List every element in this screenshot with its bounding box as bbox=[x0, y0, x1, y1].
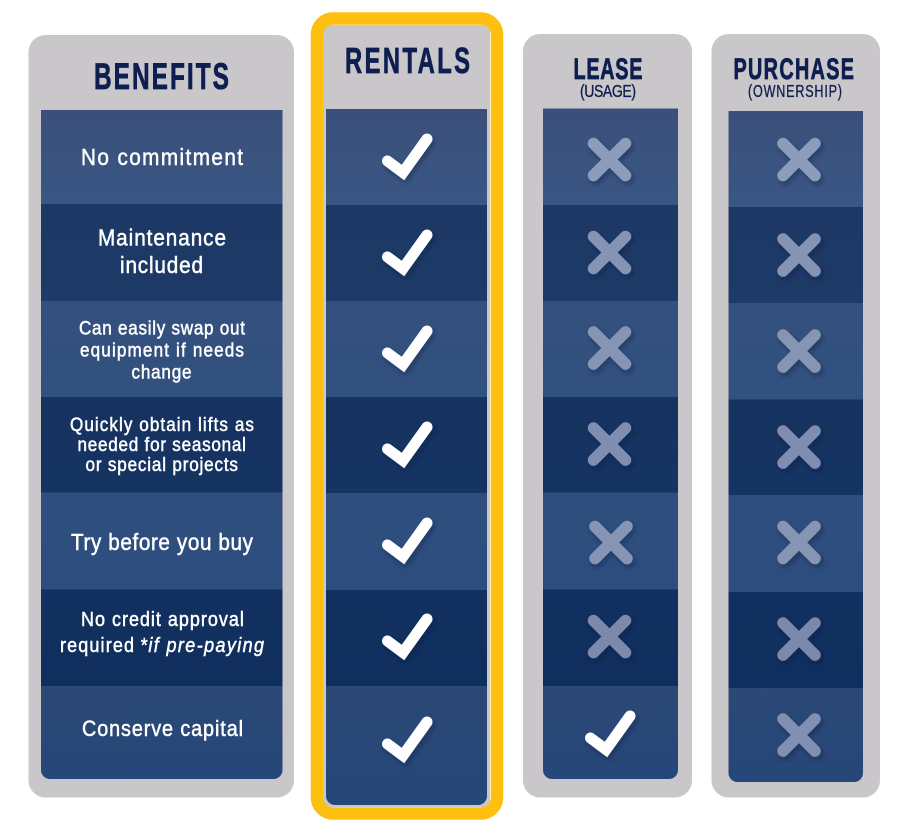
icon: x 3 bbox=[783, 335, 815, 367]
heading: benefits: BENEFITS bbox=[94, 56, 229, 97]
row: seasonal lifts: or special projects bbox=[86, 454, 238, 475]
icon: check 6 bbox=[388, 619, 427, 652]
icon: check 1 bbox=[388, 139, 427, 172]
row: seasonal lifts: Quickly obtain lifts as bbox=[70, 414, 254, 435]
row: no credit approval: No credit approval bbox=[81, 609, 244, 631]
row: swap out equipment bbox=[41, 301, 282, 397]
icon: x 3 bbox=[594, 332, 626, 364]
icon: check 4 bbox=[388, 427, 427, 460]
subheading: usage: (USAGE) bbox=[580, 81, 636, 101]
row: conserve capital bbox=[41, 686, 282, 779]
icon: check 7 bbox=[388, 722, 427, 756]
row: try before you buy: Try before you buy bbox=[71, 529, 253, 555]
row: maintenance included: Maintenance bbox=[98, 224, 226, 251]
row: no credit approval bbox=[41, 590, 282, 686]
row: no credit approval: *if pre-paying bbox=[140, 635, 264, 657]
panel: benefits bbox=[28, 35, 294, 798]
row: no credit approval: required bbox=[60, 635, 134, 657]
row: conserve capital: Conserve capital bbox=[82, 717, 243, 741]
icon: x 4 bbox=[594, 428, 626, 460]
icon: check 2 bbox=[388, 235, 427, 268]
panel: rentals highlighted bbox=[317, 18, 497, 814]
icon: x 1 bbox=[594, 144, 626, 176]
row: swap out equipment: change bbox=[132, 362, 192, 383]
icon: x 7 bbox=[783, 719, 815, 751]
icon: check 5 bbox=[388, 523, 427, 556]
row: maintenance included: included bbox=[120, 252, 203, 278]
icon: check 3 bbox=[388, 331, 427, 364]
heading: lease: LEASE bbox=[574, 53, 642, 86]
icon: x 6 bbox=[783, 623, 815, 655]
row: swap out equipment: equipment if needs bbox=[80, 340, 244, 361]
panel: lease bbox=[523, 34, 692, 798]
row: seasonal lifts bbox=[41, 397, 282, 492]
row: try before you buy bbox=[41, 492, 282, 590]
row: swap out equipment: Can easily swap out bbox=[79, 318, 245, 339]
heading: rentals: RENTALS bbox=[345, 41, 470, 81]
icon: x 6 bbox=[594, 620, 626, 652]
row: seasonal lifts: needed for seasonal bbox=[78, 434, 246, 455]
icon: x 2 bbox=[783, 239, 815, 271]
icon: x 2 bbox=[594, 236, 626, 268]
icon: x 4 bbox=[783, 431, 815, 463]
row: maintenance included bbox=[41, 204, 282, 301]
icon: x 5 bbox=[783, 526, 815, 558]
icon: x 1 bbox=[783, 144, 815, 176]
panel: purchase bbox=[712, 34, 880, 798]
heading: purchase: PURCHASE bbox=[734, 53, 854, 86]
row: no commitment: No commitment bbox=[81, 144, 243, 170]
subheading: ownership: (OWNERSHIP) bbox=[748, 82, 842, 102]
icon: x 5 bbox=[595, 526, 627, 558]
icon: check bbox=[590, 716, 630, 750]
row: no commitment bbox=[41, 110, 282, 204]
